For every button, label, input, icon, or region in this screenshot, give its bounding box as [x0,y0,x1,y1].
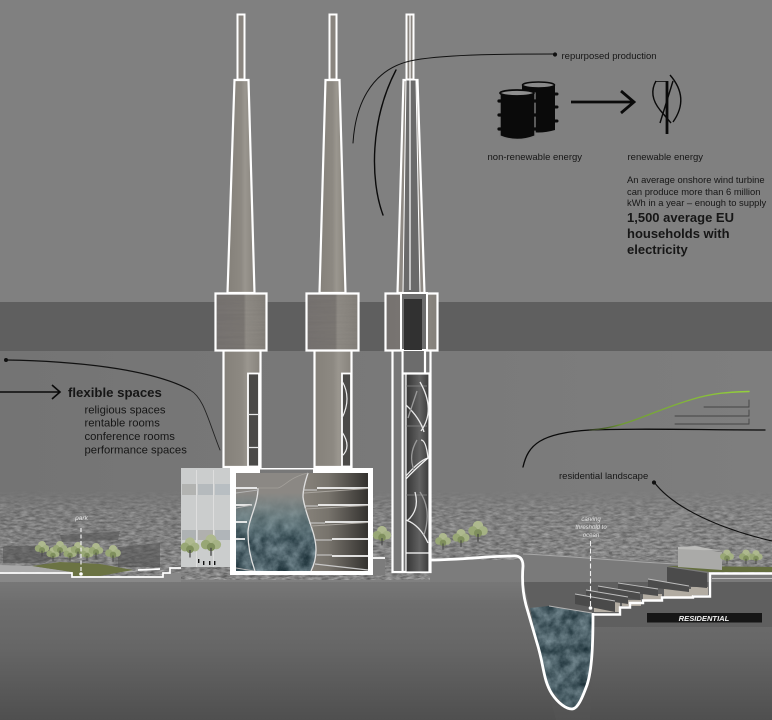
ground strip and lower ground [0,553,772,720]
residential leader diagram [523,392,765,467]
flexible spaces text: performance spaces [84,444,187,456]
ground section line [0,558,385,577]
leader lines top [353,54,556,215]
energy labels: renewable energy [628,152,703,163]
carving threshold label and marker: threshold to [575,525,607,531]
trees right of tower [435,521,488,550]
residential label: RESIDENTIAL [679,614,730,623]
leader: residential landscape [652,480,772,541]
arrow: flexible spaces [0,385,60,399]
wind turbine fact text: can produce more than 6 million [627,186,760,197]
facade building [181,468,232,567]
energy labels: non-renewable energy [488,152,582,163]
flexible spaces text [68,385,187,456]
icon: vertical wind turbine [653,75,681,134]
label: residential landscape: residential landscape [559,471,648,482]
carving threshold label and marker: carving [581,517,601,523]
icon: oil barrels [499,82,557,140]
wind turbine fact text: households with [627,226,730,241]
flexible spaces text: conference rooms [84,431,175,443]
wind turbine fact text: electricity [627,242,688,257]
carving threshold label and marker: ocean [583,533,600,539]
tree by tower 3 [373,526,391,545]
flexible spaces text: religious spaces [84,404,166,416]
flexible spaces text: rentable rooms [84,418,160,430]
turbine blade curves [406,382,428,543]
wind turbine fact text: kWh in a year – enough to supply [627,197,766,208]
city panorama backdrop [0,490,772,580]
dark horizontal band [0,302,772,351]
wind turbine fact text: 1,500 average EU [627,210,734,225]
tower 2 [306,14,358,467]
energy labels [488,152,703,163]
wind turbine fact text: An average onshore wind turbine [627,174,765,185]
central section: flexible rooms with water void [230,468,373,575]
leader: flexible spaces [4,358,220,450]
label: repurposed production: repurposed production [562,51,657,62]
tower 1 [216,14,266,467]
ocean pit [430,556,595,712]
trees and park ground left [0,541,138,576]
residential terraces [523,546,772,614]
flexible spaces text: flexible spaces [68,385,162,400]
carving threshold label and marker [575,517,607,610]
arrow: non-renewable to renewable [571,91,634,113]
tower 3 section [386,14,438,572]
park label and marker [74,515,89,576]
park label and marker: park [74,515,89,522]
wind turbine fact text [627,174,766,257]
residential label [647,613,762,623]
mid background [0,351,772,577]
